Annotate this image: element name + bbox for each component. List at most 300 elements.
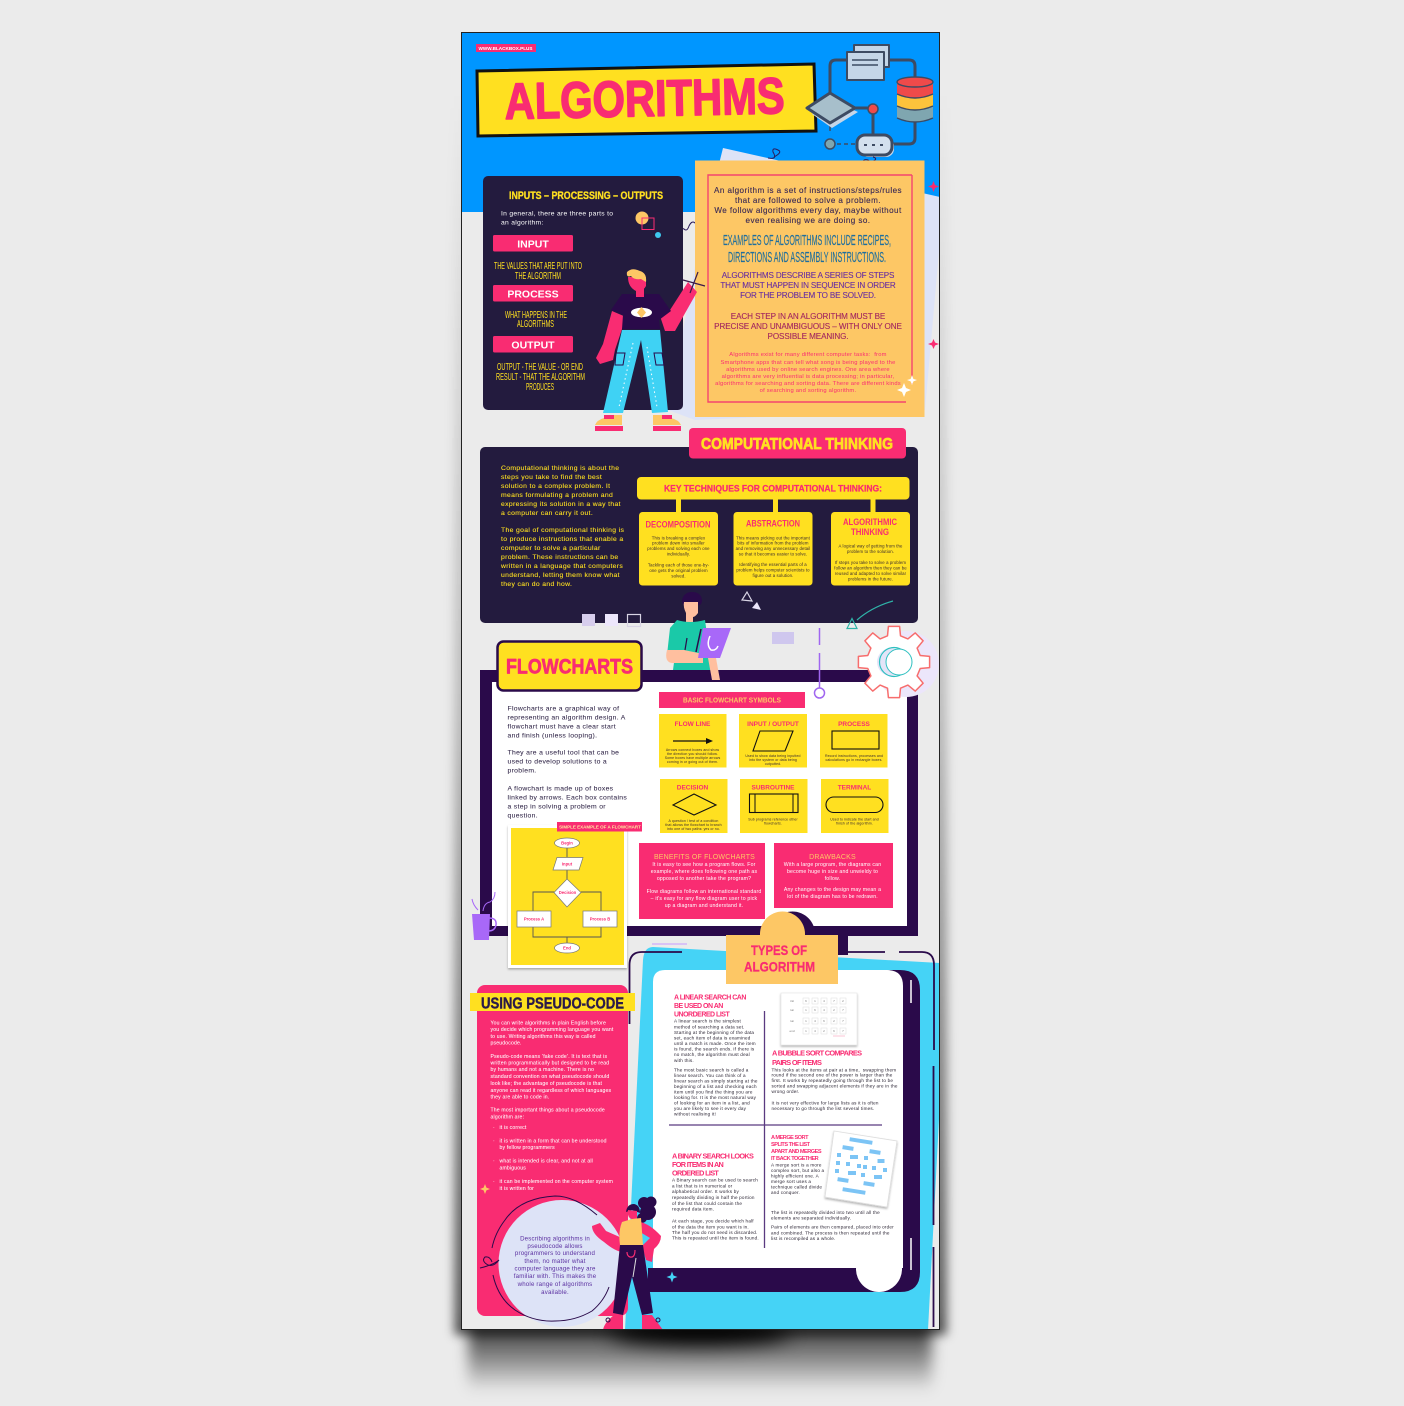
illustration: woman presenting xyxy=(592,1196,663,1330)
card: algorithmic thinking: If steps you take to solve a problem xyxy=(835,560,906,565)
bullet list: it is written in a form that can be understood xyxy=(500,1138,607,1144)
pseudo-code body text: by humans and not a machine. There is no xyxy=(490,1067,594,1073)
poster artwork xyxy=(461,32,940,1330)
quadrant: bubble sort: PAIRS OF ITEMS xyxy=(772,1058,822,1067)
symbol: input output: Used to show data being inputted xyxy=(745,754,801,758)
panel: inputs processing outputs xyxy=(483,176,683,410)
quadrant: linear search: beginning of a list and checking each xyxy=(674,1084,757,1089)
input button xyxy=(493,235,573,252)
process description: ALGORITHMS xyxy=(517,319,554,330)
small paragraph: algorithms used by online search engines. One area where xyxy=(726,367,890,373)
panel: types of algorithm background xyxy=(625,944,940,1330)
figure: bubble sort table: 1 xyxy=(805,1008,807,1012)
heading tab: COMPUTATIONAL THINKING xyxy=(701,436,893,453)
node: input: Input xyxy=(562,862,573,866)
quadrant: merge sort: The list is repeatedly divided into two until all the xyxy=(771,1210,880,1215)
callout: drawbacks: lot of the diagram has to be redrawn. xyxy=(787,894,878,900)
decorative squares and triangles xyxy=(582,592,893,644)
card: decomposition: DECOMPOSITION xyxy=(646,520,710,530)
heading tab xyxy=(689,428,906,458)
process description xyxy=(505,311,567,327)
figure: bubble sort table: 7 xyxy=(842,1029,844,1033)
figure: bubble sort table: 1 xyxy=(814,999,816,1003)
bullet list: it is correct xyxy=(500,1125,527,1131)
card: algorithmic thinking: problems in the future. xyxy=(848,576,893,582)
quadrant: linear search: with this. xyxy=(674,1058,694,1063)
quadrant: binary search: FOR ITEMS IN AN xyxy=(672,1160,724,1169)
bullet list: by fellow programmers xyxy=(500,1145,555,1151)
pseudo-code body text: You can write algorithms in plain English before xyxy=(490,1020,606,1026)
quadrant: linear search: without realising it! xyxy=(674,1112,716,1116)
top xyxy=(619,1218,643,1245)
card: abstraction: and removing any unnecessary detail xyxy=(736,546,810,551)
steps paragraph: FOR THE PROBLEM TO BE SOLVED. xyxy=(740,291,876,300)
card: decomposition: problem down into smaller xyxy=(652,540,705,546)
node: process a xyxy=(517,911,551,927)
quadrant: binary search: a list that is in numerical or xyxy=(672,1184,733,1188)
pseudo-code body text: you decide which programming language you want xyxy=(490,1027,614,1033)
figure: bubble sort table: 6 xyxy=(823,1019,825,1023)
quadrant: linear search: linear search as simply starting at the xyxy=(674,1078,758,1084)
output description: RESULT - THAT THE ALGORITHM xyxy=(496,372,585,383)
quadrant: merge sort: A merge sort is a more xyxy=(771,1162,822,1168)
intro paragraph: We follow algorithms every day, maybe without xyxy=(714,206,902,215)
quadrant: bubble sort: sorted and swapping adjacent elements if they are in the xyxy=(772,1084,898,1088)
quadrant: merge sort: elements are separated individually. xyxy=(771,1216,851,1220)
symbol: flow line: the direction you should follow. xyxy=(667,752,718,756)
quadrant: binary search: At each stage, you decide which half xyxy=(672,1218,754,1224)
card: algorithmic thinking: problem to the solution. xyxy=(847,549,894,554)
small paragraph: algorithms are very influential is data processing; in particular, xyxy=(722,374,895,380)
light blue sheet xyxy=(625,947,940,1330)
callout: pseudocode circle: pseudocode allows xyxy=(527,1243,583,1250)
pseudo-code body text: Pseudo-code means ‘fake code’. It is text that is xyxy=(490,1054,607,1060)
illustration: man with tablet xyxy=(666,592,731,680)
title banner: ALGORITHMS xyxy=(504,67,785,130)
quadrant: binary search: of the list that could contain the xyxy=(672,1201,742,1206)
node: end xyxy=(554,943,580,953)
precision paragraph: PRECISE AND UNAMBIGUOUS – WITH ONLY ONE xyxy=(714,322,903,331)
card: algorithmic thinking: follow an algorithm then they can be xyxy=(834,566,907,570)
intro text: an algorithm: xyxy=(501,220,544,226)
bullet list: ambiguous xyxy=(500,1166,526,1172)
symbol: terminal xyxy=(821,779,888,833)
body text: to produce instructions that enable a xyxy=(501,536,624,543)
card: decomposition: one gets the original problem xyxy=(649,568,708,573)
poster border xyxy=(462,32,940,1330)
quadrant: binary search xyxy=(672,1152,759,1240)
body text: solution to a complex problem. It xyxy=(501,483,610,490)
card: abstraction: Identifying the essential parts of a xyxy=(739,562,807,567)
pseudo-code body text: The most important things about a pseudocode xyxy=(490,1108,605,1114)
forearm xyxy=(708,658,720,680)
pseudo-code body text: they are able to code in. xyxy=(490,1094,549,1100)
symbol: decision: DECISION xyxy=(677,784,709,792)
input description: THE ALGORITHM xyxy=(515,271,561,282)
quadrant: binary search: alphabetical order. It works by xyxy=(672,1189,739,1194)
quadrant: bubble sort: first. It works by repeatedly going through the list to be xyxy=(772,1078,893,1083)
quadrant: binary search: ORDERED LIST xyxy=(672,1168,719,1178)
process description: WHAT HAPPENS IN THE xyxy=(505,310,567,321)
small paragraph: Algorithms exist for many different computer tasks: from xyxy=(729,352,887,358)
body text: problem. These instructions can be xyxy=(501,554,619,561)
symbol: input output: outputted. xyxy=(765,762,781,766)
output button xyxy=(493,336,573,352)
quadrant: linear search: looking for. It is the most natural way xyxy=(674,1095,757,1100)
panel: using pseudo-code xyxy=(470,985,635,1316)
white card xyxy=(653,970,903,1268)
card: decomposition: This is breaking a complex xyxy=(652,536,706,540)
quadrant: linear search: linear search. You can think of a xyxy=(674,1073,746,1078)
node: process b xyxy=(583,911,617,927)
output description: OUTPUT - THE VALUE - OR END xyxy=(497,362,583,373)
intro paragraph: that are followed to solve a problem. xyxy=(735,196,881,205)
pseudo-code body text: look like; the advantage of pseudocode is that xyxy=(490,1081,603,1087)
drop shadow under the poster xyxy=(454,90,947,1392)
output description xyxy=(496,363,585,390)
quadrant: merge sort xyxy=(771,1135,894,1241)
bullet list: it can be implemented on the computer system xyxy=(500,1179,613,1185)
quadrant: merge sort: APART AND MERGES xyxy=(771,1149,822,1155)
bullet list: what is intended is clear, and not at all xyxy=(500,1158,593,1164)
intro text: In general, there are three parts to xyxy=(501,210,613,218)
symbol: subroutine: flowcharts. xyxy=(764,822,782,826)
card: abstraction: so that it becomes easier to solve. xyxy=(739,552,807,556)
basic flowchart symbols xyxy=(659,692,888,833)
quadrant: linear search: of looking for an item in a list, and xyxy=(674,1100,750,1106)
callout: drawbacks: follow. xyxy=(825,876,840,882)
example label xyxy=(557,822,642,832)
symbols header xyxy=(659,692,805,708)
figure: bubble sort table: 7 xyxy=(842,1019,844,1023)
figure: bubble sort table xyxy=(781,993,857,1045)
callout: pseudocode circle: Describing algorithms in xyxy=(520,1236,590,1242)
symbol: input output: into the system or data being xyxy=(749,758,797,762)
decorative shapes on dark panel xyxy=(636,212,661,238)
flowcharts description: flowchart must have a clear start xyxy=(508,724,616,730)
icon: yellow sparkle xyxy=(480,1184,490,1194)
quadrant: binary search: required data item. xyxy=(672,1206,714,1212)
icon: sparkles xyxy=(897,375,917,397)
arms xyxy=(596,311,626,364)
symbol: terminal: Used to indicate the start and xyxy=(830,818,879,822)
quadrant: binary search: repeatedly dividing in half the portion xyxy=(672,1195,755,1200)
flowcharts description: linked by arrows. Each box contains xyxy=(508,794,627,802)
quadrant: bubble sort: It is not very effective for large lists as it is often xyxy=(772,1100,879,1106)
precision paragraph: EACH STEP IN AN ALGORITHM MUST BE xyxy=(731,312,886,321)
card: decomposition: Tackling each of those one-by- xyxy=(648,562,710,568)
flowcharts description: and finish (unless looping). xyxy=(508,732,597,740)
outline frame xyxy=(630,952,934,1327)
jeans xyxy=(603,330,668,413)
bullet list: · xyxy=(493,1125,495,1131)
quadrant: linear search: Starting at the beginning of the data xyxy=(674,1030,754,1035)
hair xyxy=(626,1196,656,1223)
quadrant: binary search: A BINARY SEARCH LOOKS xyxy=(672,1152,754,1160)
inner pink border xyxy=(708,175,912,402)
input description xyxy=(494,262,582,279)
squiggles near intro panel xyxy=(678,149,876,233)
card: algorithmic thinking xyxy=(831,512,910,586)
callout: pseudocode circle: them, no matter what xyxy=(524,1258,586,1265)
precision paragraph: POSSIBLE MEANING. xyxy=(768,332,848,341)
pseudo-code body text: written programmatically but designed to be read xyxy=(490,1060,609,1066)
callout: benefits of flowcharts: – it's easy for any flow diagram user to pick xyxy=(651,896,758,902)
figure: bubble sort table: 6 xyxy=(814,1008,816,1012)
callout: pseudocode circle: familiar with. This makes the xyxy=(514,1273,597,1280)
callout: drawbacks: become huge in size and unwieldy to xyxy=(787,869,878,875)
flowcharts description: problem. xyxy=(508,768,537,774)
node: decision: Decision xyxy=(559,890,577,895)
quadrant: merge sort: highly efficient one. A xyxy=(771,1174,820,1178)
symbol: decision: A question / test of a condition xyxy=(669,819,718,823)
face and neck xyxy=(628,1210,637,1222)
icon: gear xyxy=(858,626,939,698)
card: decomposition: solved. xyxy=(671,574,686,578)
steps paragraph: THAT MUST HAPPEN IN SEQUENCE IN ORDER xyxy=(720,281,896,290)
quadrant: bubble sort: necessary to go through the list several times. xyxy=(772,1106,874,1111)
key techniques header xyxy=(637,477,910,500)
panel: intro definition xyxy=(695,160,924,417)
quadrant: linear search: A linear search is the simplest xyxy=(674,1018,741,1024)
icon: teal star xyxy=(666,1272,678,1282)
purple timeline line xyxy=(814,628,824,698)
process button: PROCESS xyxy=(507,288,559,300)
symbol: flow line xyxy=(659,714,726,768)
pseudo-code body text: algorithm are: xyxy=(490,1114,524,1120)
figure: bubble sort table: run xyxy=(790,1019,794,1023)
dark card backing xyxy=(648,970,920,1292)
output button: OUTPUT xyxy=(511,340,555,352)
bullet list: · xyxy=(493,1158,495,1164)
example label: SIMPLE EXAMPLE OF A FLOWCHART xyxy=(559,824,641,830)
callout: benefits of flowcharts xyxy=(639,843,765,919)
quadrant: bubble sort: wrong order. xyxy=(772,1089,799,1094)
quadrant: bubble sort: A BUBBLE SORT COMPARES xyxy=(772,1048,862,1058)
trousers xyxy=(613,1245,653,1315)
neck and head xyxy=(628,277,646,297)
flowcharts description: question. xyxy=(508,812,538,820)
poster background xyxy=(461,32,940,1330)
figure: bubble sort table: 2 xyxy=(842,999,844,1003)
heading band: USING PSEUDO-CODE xyxy=(481,996,624,1012)
card: decomposition: individually. xyxy=(667,552,690,556)
node: begin xyxy=(554,838,580,848)
pseudo-code body text: standard convention on what pseudocode should xyxy=(490,1074,609,1080)
flowcharts description: representing an algorithm design. A xyxy=(508,714,626,722)
symbol: flow line: Arrows connect boxes and show xyxy=(666,748,720,752)
quadrant: linear search: set, each item of data is examined xyxy=(674,1036,751,1040)
quadrant: merge sort: complex sort, but also a xyxy=(771,1168,825,1173)
callout: pseudocode circle xyxy=(480,1196,626,1327)
symbol: process: PROCESS xyxy=(838,721,871,728)
output description: PRODUCES xyxy=(526,382,554,393)
callout: drawbacks: Any changes to the design may mean a xyxy=(784,887,881,893)
callout: benefits of flowcharts: up a diagram and understand it. xyxy=(665,903,743,909)
card: algorithmic thinking: ALGORITHMIC xyxy=(843,517,897,527)
quadrant: merge sort: SPLITS THE LIST xyxy=(771,1142,811,1148)
illustration: man pointing xyxy=(595,269,705,431)
quadrant: linear search: A LINEAR SEARCH CAN xyxy=(674,994,746,1002)
symbol: input output: INPUT / OUTPUT xyxy=(747,721,799,728)
quadrant: merge sort: and combined. The process is then repeated until the xyxy=(771,1230,890,1236)
heading: INPUTS – PROCESSING – OUTPUTS xyxy=(509,190,663,202)
heading tab: types of algorithm xyxy=(726,912,848,984)
hair xyxy=(627,269,646,282)
quadrant: linear search: The most basic search is called a xyxy=(674,1068,749,1072)
flowcharts description: A flowchart is made up of boxes xyxy=(508,786,614,792)
section heading: computational thinking xyxy=(480,428,918,623)
input button: INPUT xyxy=(517,238,549,250)
figure: bubble sort table: init xyxy=(790,999,794,1003)
lavender backdrop behind intro xyxy=(668,148,940,420)
callout: pseudocode circle: available. xyxy=(541,1289,569,1296)
symbol: terminal: TERMINAL xyxy=(838,784,871,792)
node: begin: Begin xyxy=(561,840,573,846)
node: end: End xyxy=(563,946,571,950)
flowcharts description: Flowcharts are a graphical way of xyxy=(508,706,619,712)
quadrant: merge sort: A MERGE SORT xyxy=(771,1135,809,1141)
body text: written in a language that computers xyxy=(500,563,623,570)
flowcharts description: They are a useful tool that can be xyxy=(508,750,619,756)
node: decision xyxy=(554,879,581,907)
node: process b: Process B xyxy=(590,916,610,922)
body text: means formulating a problem and xyxy=(501,492,613,499)
callout: drawbacks: With a large program, the diagrams can xyxy=(784,862,881,868)
quadrant: linear search xyxy=(674,994,758,1116)
shirt xyxy=(611,294,671,329)
bullet list: it is written for xyxy=(500,1186,534,1192)
body text: steps you take to find the best xyxy=(501,474,602,481)
quadrant: merge sort: merge sort uses a xyxy=(771,1179,811,1184)
figure: bubble sort table: 4 xyxy=(823,999,825,1003)
figure: bubble sort table: 1 xyxy=(805,1019,807,1023)
bullet list: · xyxy=(493,1138,495,1144)
shirt xyxy=(667,620,712,670)
arms xyxy=(592,1223,625,1252)
card: abstraction: bits of information from the problem xyxy=(737,540,809,546)
callout: drawbacks xyxy=(774,843,893,908)
quadrant: binary search: The half you do not need is discarded. xyxy=(672,1230,758,1235)
card: decomposition xyxy=(639,512,718,586)
body text: Computational thinking is about the xyxy=(501,465,619,472)
figure: bubble sort table: 7 xyxy=(833,999,835,1003)
figure: bubble sort table: 4 xyxy=(814,1019,816,1023)
symbol: process: Record instructions, processes and xyxy=(825,754,883,758)
website tag xyxy=(476,44,536,52)
symbol: input output xyxy=(739,714,807,768)
flowcharts description: a step in solving a problem or xyxy=(508,804,606,810)
symbol: process: calculations go in rectangle boxes. xyxy=(825,758,883,762)
process button xyxy=(493,285,573,302)
small paragraph: Smartphone apps that can tell what song is being played to the xyxy=(720,360,896,366)
quadrant: binary search: This is repeated until the item is found. xyxy=(672,1236,759,1240)
bullet list: · xyxy=(493,1179,495,1185)
small paragraph: of searching and sorting algorithm. xyxy=(760,388,856,394)
callout: benefits of flowcharts: Flow diagrams follow an international standard xyxy=(647,889,761,895)
quadrant: bubble sort: This looks at the items at pair at a time, swapping them xyxy=(772,1068,896,1072)
body text: The goal of computational thinking is xyxy=(501,527,625,534)
symbol: process xyxy=(820,714,888,768)
figure: bubble sort table: 1 xyxy=(805,1029,807,1033)
panel: intro definition: DIRECTIONS AND ASSEMBLY INSTRUCTIONS. xyxy=(728,249,886,266)
panel: flowcharts frame xyxy=(480,670,918,936)
callout: benefits of flowcharts: It is easy to see how a program flows. For xyxy=(652,862,756,868)
examples callout xyxy=(724,234,890,262)
symbol: flow line: Some boxes have multiple arrows xyxy=(665,756,720,760)
quadrant: binary search: A Binary search can be used to search xyxy=(672,1178,758,1182)
symbol: flow line: FLOW LINE xyxy=(675,721,711,728)
figure: bubble sort table: run xyxy=(790,1008,794,1012)
symbol: decision: that allows the flowchart to branch xyxy=(665,823,722,827)
icon: process flow diagram xyxy=(807,45,933,157)
key techniques header: KEY TECHNIQUES FOR COMPUTATIONAL THINKING: xyxy=(664,484,882,494)
quadrant: bubble sort: round if the second one of the power is larger than the xyxy=(772,1072,893,1078)
boots xyxy=(603,1315,623,1330)
figure: bubble sort table: 4 xyxy=(823,1008,825,1012)
figure: bubble sort table: 2 xyxy=(833,1019,835,1023)
figure: bubble sort table: 6 xyxy=(805,999,807,1003)
face xyxy=(684,602,698,622)
pointer cross xyxy=(683,272,705,293)
body text: expressing its solution in a way that xyxy=(501,501,621,508)
quadrant: linear search: no match, the algorithm must deal xyxy=(674,1052,750,1057)
callout: benefits of flowcharts: example, where does following one path as xyxy=(651,869,757,875)
hair xyxy=(682,592,702,606)
quadrant: merge sort: Pairs of elements are then compared, placed into order xyxy=(771,1224,894,1230)
card: abstraction: ABSTRACTION xyxy=(746,518,800,528)
quadrant: bubble sort xyxy=(772,1048,898,1111)
pseudo-code body text: anyone can read it regardless of which languages xyxy=(490,1088,612,1094)
figure: bubble sort table: 2 xyxy=(833,1008,835,1012)
figure: bubble sort table: 4 xyxy=(814,1029,816,1033)
quadrant: binary search: of the data the item you want is in. xyxy=(672,1224,749,1230)
figure: bubble sort table: 6 xyxy=(833,1029,835,1033)
icon: pink stars xyxy=(928,181,939,349)
card: abstraction: problem helps computer scientists to xyxy=(736,568,810,572)
symbol: subroutine: Sub programs reference other xyxy=(748,818,798,822)
quadrant: merge sort: and conquer. xyxy=(771,1190,800,1195)
shirt emblem xyxy=(631,307,652,318)
figure: bubble sort table: end xyxy=(789,1029,795,1033)
figure: merge sort tree xyxy=(825,1131,897,1207)
symbol: decision: into one of two paths: yes or no. xyxy=(667,827,720,831)
card: decomposition: problems and solving each one xyxy=(647,546,710,551)
quadrant: linear search: until a match is made. Once the item xyxy=(674,1041,756,1046)
quadrant: merge sort: list is recompiled as a whole. xyxy=(771,1236,835,1241)
panel: intro definition: EXAMPLES OF ALGORITHMS INCLUDE RECIPES, xyxy=(723,232,891,249)
symbol: subroutine: SUBROUTINE xyxy=(752,784,795,792)
body text: computer to solve a particular xyxy=(501,545,601,552)
tablet xyxy=(698,628,731,658)
card: abstraction xyxy=(734,512,812,586)
heading: flowcharts: FLOWCHARTS xyxy=(506,656,633,678)
flowcharts description: used to develop solutions to a xyxy=(508,758,607,766)
blue header background xyxy=(461,32,940,212)
callout: benefits of flowcharts: BENEFITS OF FLOWCHARTS xyxy=(654,854,755,861)
body text: understand, letting them know what xyxy=(501,572,620,579)
heading tab: types of algorithm: TYPES OF xyxy=(751,942,807,958)
node: process a: Process A xyxy=(524,916,544,922)
quadrant: linear search: UNORDERED LIST xyxy=(674,1012,730,1018)
simple flowchart example xyxy=(508,822,642,968)
body text: a computer can carry it out. xyxy=(501,510,593,517)
symbol: decision xyxy=(660,779,728,833)
arm xyxy=(666,650,703,663)
intro paragraph: An algorithm is a set of instructions/steps/rules xyxy=(714,186,902,195)
quadrant: linear search: is found, the search ends. If there is xyxy=(674,1046,755,1052)
card: abstraction: This means picking out the important xyxy=(736,536,811,540)
